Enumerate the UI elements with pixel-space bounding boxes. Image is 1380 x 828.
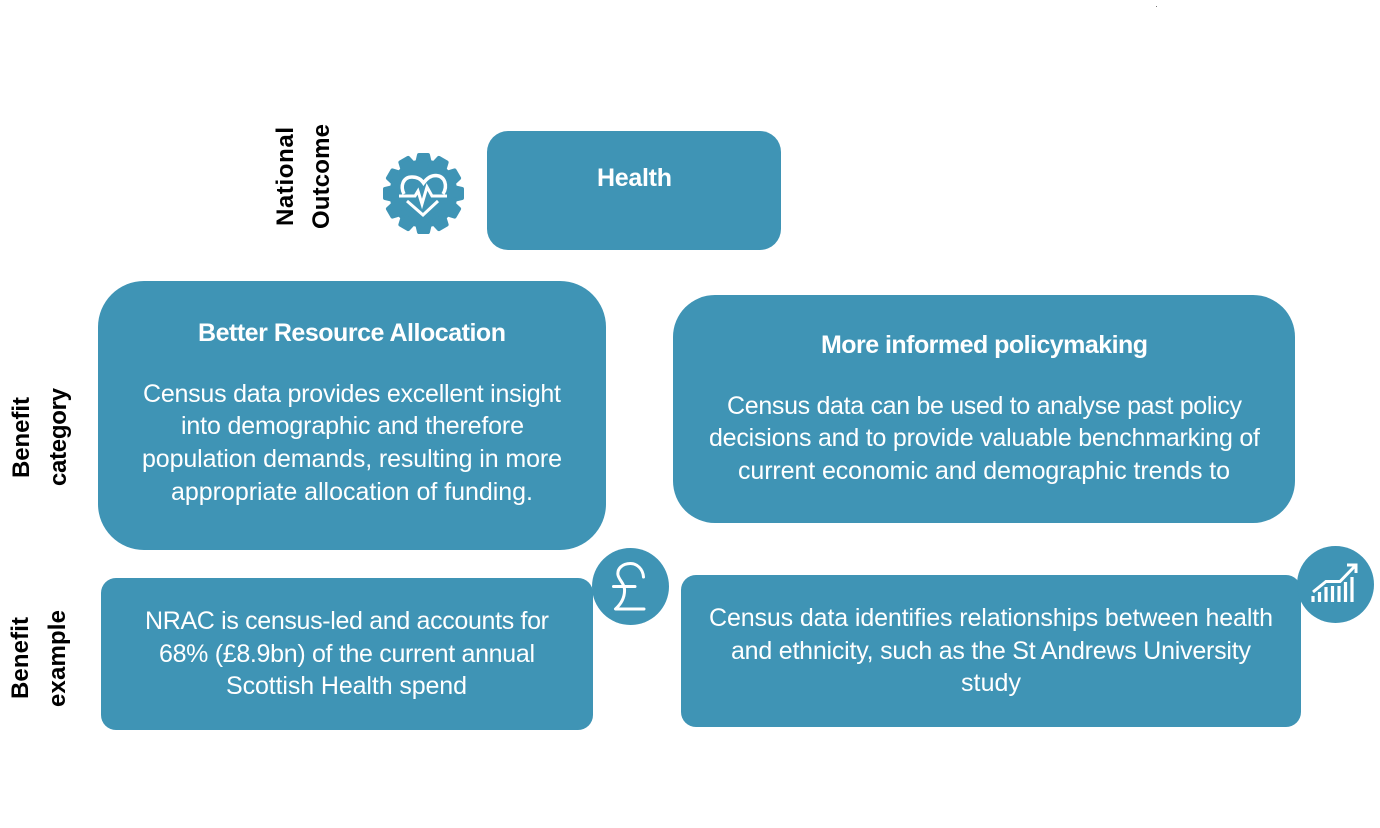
- panel: St Andrews benefit example: Census data identifies relationships between health: [709, 604, 1273, 632]
- label: Benefit category: [8, 387, 72, 486]
- text: resource allocation description: population demands, resulting in more: [142, 445, 562, 473]
- label: National Outcome: Outcome: [308, 124, 335, 229]
- text: resource allocation description: appropriate allocation of funding.: [171, 478, 533, 506]
- heading: Better Resource Allocation: Better Resource Allocation: [198, 319, 506, 347]
- label: Benefit example: Benefit: [7, 617, 34, 699]
- icon: pound sign: [592, 548, 669, 625]
- label: Benefit example: example: [44, 610, 71, 707]
- icon: gear with heart: [385, 155, 462, 232]
- icon: rising chart: [1297, 546, 1374, 623]
- heading: More informed policymaking: More informed policymaking: [821, 331, 1148, 359]
- text: policymaking description: current economic and demographic trends to: [738, 457, 1230, 485]
- text: policymaking description: [709, 392, 1260, 485]
- label: Benefit category: Benefit: [8, 397, 35, 478]
- text: policymaking description: decisions and to provide valuable benchmarking of: [709, 424, 1260, 452]
- panel: Better Resource Allocation: [98, 281, 606, 550]
- panel: Health national outcome: [487, 131, 781, 250]
- panel: NRAC benefit example: 68% (£8.9bn) of the current annual: [159, 640, 535, 668]
- panel: Health national outcome: Health: [597, 164, 672, 192]
- panel: NRAC benefit example: NRAC is census-led and accounts for: [145, 607, 549, 635]
- text: resource allocation description: into demographic and therefore: [181, 412, 524, 440]
- text: policymaking description: Census data can be used to analyse past policy: [727, 392, 1242, 420]
- label: Benefit example: [7, 610, 71, 707]
- text: resource allocation description: [142, 380, 562, 506]
- panel: More informed policymaking: [673, 295, 1295, 523]
- panel: St Andrews benefit example: [681, 575, 1301, 727]
- label: Benefit category: category: [45, 387, 72, 486]
- panel: NRAC benefit example: Scottish Health spend: [226, 672, 467, 700]
- label: National Outcome: National: [272, 127, 299, 226]
- text: resource allocation description: Census data provides excellent insight: [143, 380, 561, 408]
- label: National Outcome: [272, 124, 335, 229]
- panel: St Andrews benefit example: study: [961, 669, 1022, 697]
- panel: St Andrews benefit example: and ethnicity, such as the St Andrews University: [731, 637, 1252, 665]
- panel: NRAC benefit example: [101, 578, 593, 730]
